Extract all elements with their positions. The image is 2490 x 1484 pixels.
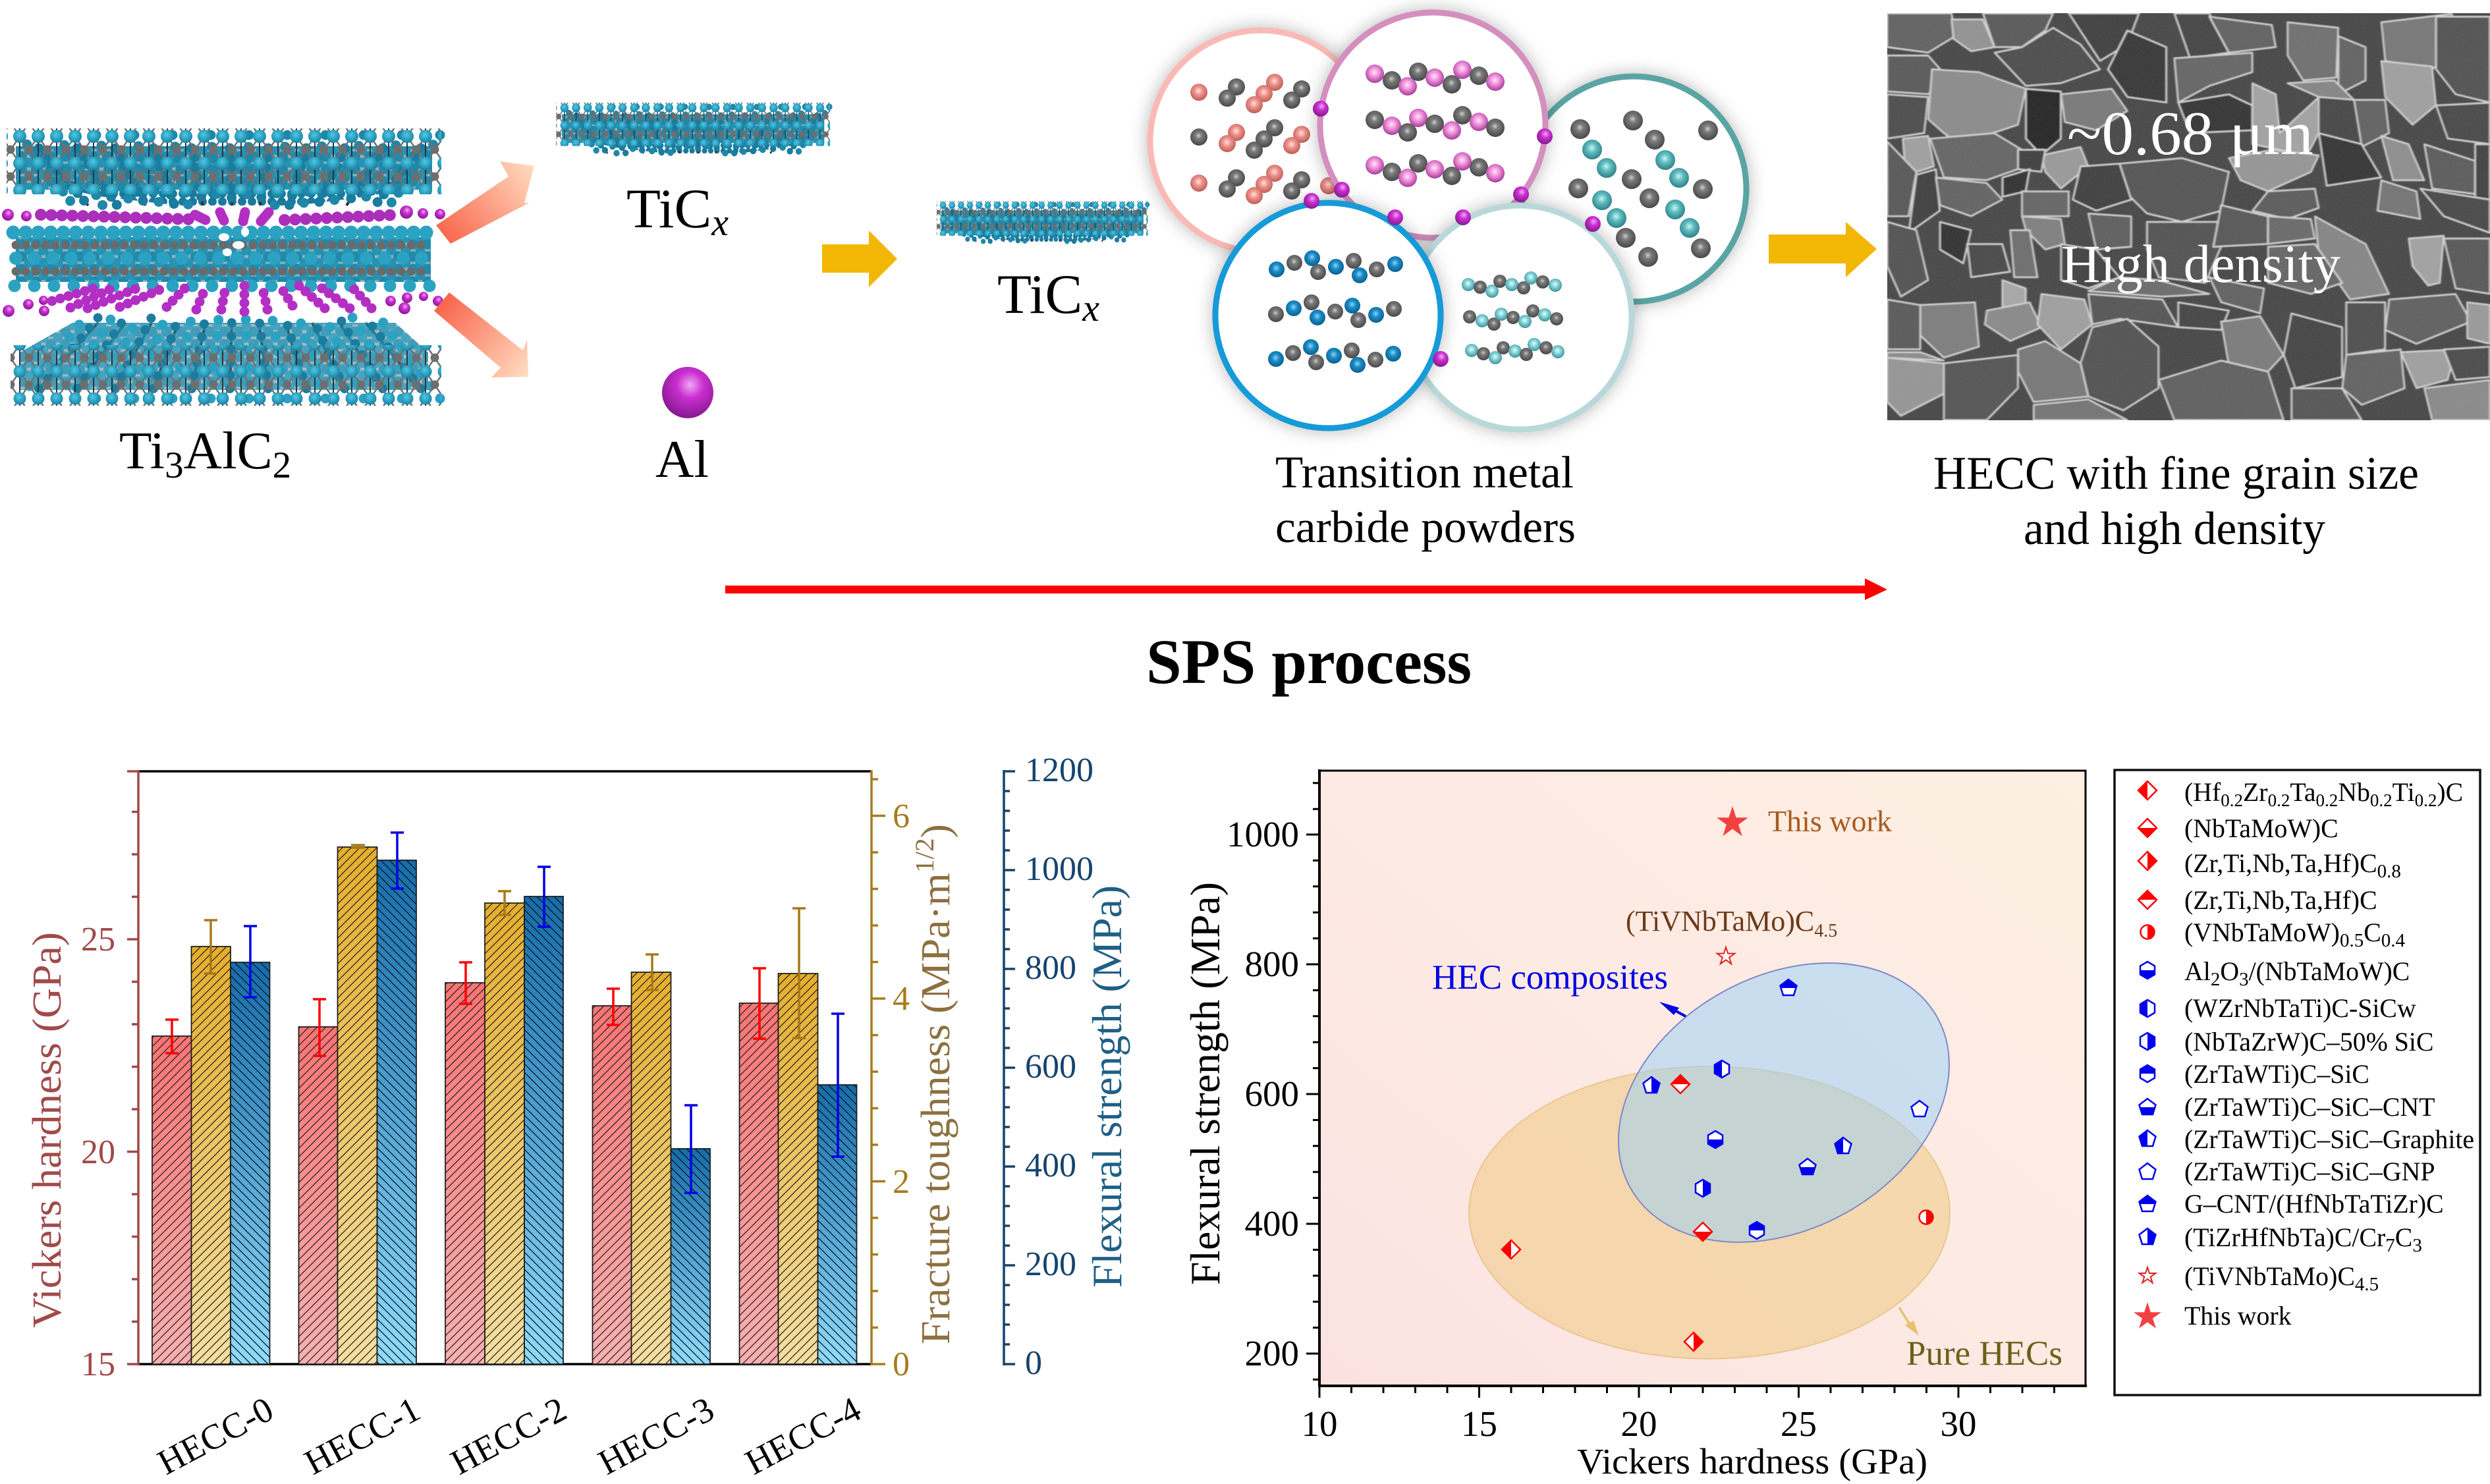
annotation: HEC composites: HEC composites	[1432, 958, 1668, 997]
error bars: strength	[244, 833, 844, 1193]
region: pure HECs	[1469, 1066, 1950, 1359]
legend text: 3	[2239, 969, 2249, 990]
axis: Vickers hardness: 20	[81, 1134, 115, 1171]
circle: light teal atoms	[1408, 206, 1632, 429]
label: HECC result: and high density	[2024, 503, 2325, 555]
axis: flexural strength: 600	[1025, 1048, 1076, 1086]
legend text: (ZrTaWTi)C–SiC	[2184, 1060, 2369, 1089]
frame and ticks	[1319, 771, 2086, 1386]
group HECC-4	[739, 974, 856, 1364]
error bars: toughness	[204, 845, 806, 1038]
legend text: 0.2	[2316, 790, 2338, 810]
legend text: (NbTaMoW)C	[2184, 814, 2338, 843]
legend text: C	[2364, 918, 2381, 947]
x tick labels: 25	[1781, 1404, 1817, 1444]
connector balls	[1304, 101, 1601, 367]
annotation: TiVNbTaMo: (TiVNbTaMo)C	[1626, 905, 1814, 937]
x tick labels: 10	[1302, 1404, 1337, 1444]
plot background	[1319, 771, 2086, 1386]
category labels: HECC-3	[592, 1389, 721, 1483]
label: HECC result	[1933, 448, 2419, 555]
legend text: Ta	[2290, 778, 2316, 807]
region: HEC composites	[1569, 907, 1999, 1298]
legend text: (ZrTaWTi)C–SiC–Graphite	[2184, 1125, 2474, 1154]
legend text: (ZrTaWTi)C–SiC–GNP	[2184, 1157, 2435, 1186]
axis: Vickers hardness: Vickers hardness (GPa)	[25, 932, 70, 1328]
label: Ti3AlC2: 3	[165, 445, 184, 486]
legend text: Nb	[2338, 778, 2370, 807]
circle: blue atoms	[1215, 203, 1441, 428]
axis: fracture toughness: 6	[893, 798, 910, 835]
annotation: Pure HECs	[1899, 1307, 2062, 1373]
annotation: TiVNbTaMo	[1626, 905, 1837, 964]
axis: flexural strength: 800	[1025, 949, 1076, 987]
y tick labels: 200	[1245, 1333, 1299, 1373]
axis: flexural strength: 200	[1025, 1246, 1076, 1283]
x axis title: Vickers hardness (GPa)	[1577, 1441, 1927, 1481]
arrow: Ti3AlC2 to Al	[434, 292, 528, 377]
lattice top layer	[7, 128, 441, 206]
icon: Al sphere	[662, 367, 713, 418]
y tick labels: 600	[1245, 1074, 1299, 1114]
axis: Vickers hardness: 15	[81, 1346, 115, 1383]
axis: flexural strength: 1200	[1025, 752, 1093, 789]
circle: teal atoms	[1521, 76, 1746, 302]
title: SPS process: SPS process	[1146, 626, 1472, 697]
annotation: HEC composites	[1432, 958, 1686, 1016]
legend text: (Zr,Ti,Nb,Ta,Hf)C	[2184, 886, 2377, 915]
panel: transition metal carbide circles	[1150, 13, 1746, 429]
axis: flexural strength: 1000	[1025, 850, 1093, 888]
legend text: (TiZrHfNbTa)C/Cr	[2184, 1223, 2385, 1252]
legend text	[2184, 778, 2474, 1331]
axis: flexural strength	[1004, 752, 1130, 1382]
group HECC-1	[299, 847, 416, 1364]
axis: flexural strength: 0	[1025, 1344, 1042, 1382]
arrow: gold to TiCx	[822, 231, 897, 287]
legend text: (TiVNbTaMo)C	[2184, 1262, 2355, 1291]
label: transition metal carbide powders: carbide powders	[1275, 502, 1576, 552]
legend text: 0.2	[2268, 790, 2290, 810]
axis: fracture toughness	[872, 770, 958, 1383]
legend text: 0.5	[2340, 930, 2364, 951]
label: TiCx middle: TiC	[997, 263, 1082, 325]
legend text: 0.4	[2381, 930, 2405, 951]
error bars: hardness	[165, 962, 766, 1056]
arrow: Ti3AlC2 to TiCx	[436, 161, 534, 244]
legend text: (WZrNbTaTi)C-SiCw	[2184, 994, 2416, 1023]
axis: flexural strength: Flexural strength (MPa)	[1084, 885, 1130, 1288]
annotation: this work: This work	[1768, 804, 1892, 838]
legend text: 7	[2385, 1235, 2395, 1256]
legend text: (NbTaZrW)C–50% SiC	[2184, 1028, 2434, 1057]
y axis title: Flexural strength (MPa)	[1182, 882, 1229, 1285]
legend text: Zr	[2243, 778, 2268, 807]
panel: SEM micrograph	[1887, 13, 2490, 420]
label: HECC result: HECC with fine grain size	[1933, 448, 2419, 499]
annotation: Pure HECs: Pure HECs	[1906, 1334, 2062, 1373]
panel: Ti3AlC2 lattice	[2, 128, 445, 406]
legend text: (ZrTaWTi)C–SiC–CNT	[2184, 1093, 2435, 1122]
legend text: C	[2395, 1223, 2412, 1252]
SEM label: grain size: ~0.68 μm	[2067, 99, 2313, 168]
label: Al: Al	[655, 431, 709, 489]
axis: fracture toughness: 4	[893, 980, 910, 1018]
category labels: HECC-1	[298, 1389, 427, 1483]
axis: fracture toughness: Fracture toughness (MPa·m	[914, 889, 958, 1344]
legend text: (VNbTaMoW)	[2184, 918, 2340, 947]
label: transition metal carbide powders	[1275, 447, 1576, 552]
axis: fracture toughness: 1/2	[910, 838, 939, 873]
category labels	[151, 1389, 868, 1483]
SEM label: density: High density	[2061, 234, 2340, 294]
axis: fracture toughness: )	[914, 824, 958, 838]
legend text: O	[2220, 957, 2239, 986]
category labels: HECC-2	[444, 1389, 573, 1483]
y tick labels	[1227, 814, 1299, 1373]
axis: flexural strength: 400	[1025, 1147, 1076, 1184]
y tick labels: 800	[1245, 944, 1299, 984]
axis: fracture toughness: 2	[893, 1163, 910, 1201]
lattice Al row 2	[3, 285, 443, 317]
chart: hardness vs strength scatter	[1182, 769, 2087, 1481]
label: TiCx middle: x	[1082, 287, 1099, 329]
group HECC-0	[152, 947, 270, 1364]
legend text: 0.2	[2221, 790, 2243, 810]
axis: Vickers hardness: 25	[81, 921, 115, 958]
legend markers	[2134, 781, 2161, 1329]
label: Ti3AlC2: AlC	[184, 421, 273, 480]
x tick labels	[1302, 1404, 1976, 1444]
legend text: 3	[2412, 1235, 2422, 1256]
x tick labels: 15	[1461, 1404, 1497, 1444]
TiCx lattice upper	[556, 103, 830, 153]
legend text: This work	[2184, 1302, 2292, 1331]
circle: rose atoms	[1320, 13, 1545, 238]
frame	[138, 771, 872, 1364]
legend text: (Hf	[2184, 778, 2221, 807]
annotation: TiVNbTaMo: 4.5	[1814, 921, 1837, 941]
x tick labels: 20	[1620, 1404, 1657, 1444]
group HECC-2	[445, 896, 563, 1364]
legend text: 0.2	[2370, 790, 2393, 810]
legend text: (Zr,Ti,Nb,Ta,Hf)C	[2184, 849, 2377, 878]
x tick labels: 30	[1941, 1404, 1976, 1444]
category labels: HECC-0	[151, 1389, 280, 1483]
label: transition metal carbide powders: Transition metal	[1275, 447, 1574, 497]
legend text: 2	[2211, 969, 2220, 990]
circle: pink atoms	[1150, 30, 1371, 252]
y tick labels: 1000	[1227, 814, 1299, 854]
lattice bottom layer	[11, 317, 441, 406]
category labels: HECC-4	[738, 1389, 868, 1483]
y tick labels: 400	[1245, 1203, 1299, 1244]
label: Ti3AlC2: Ti	[119, 421, 165, 480]
group HECC-3	[593, 972, 710, 1364]
legend text: G–CNT/(HfNbTaTiZr)C	[2184, 1190, 2444, 1219]
axis: Vickers hardness	[25, 770, 138, 1383]
SEM noise	[1887, 13, 2490, 420]
TiCx lattice middle	[937, 201, 1148, 242]
SEM grains	[1887, 13, 2490, 420]
legend text: 0.2	[2415, 790, 2437, 810]
arrow: gold to SEM	[1769, 222, 1877, 277]
label: TiCx upper: TiC	[626, 178, 711, 240]
arrow: SPS red	[725, 578, 1887, 600]
lattice Al row 1	[2, 206, 445, 221]
legend	[2115, 770, 2480, 1395]
legend text: )C	[2437, 778, 2463, 807]
legend text: Ti	[2393, 778, 2415, 807]
lattice middle layer	[13, 227, 435, 286]
chart: bars	[138, 771, 872, 1364]
label: TiCx upper: x	[711, 201, 729, 244]
legend text: 4.5	[2355, 1274, 2379, 1295]
axis: fracture toughness: 0	[893, 1346, 910, 1383]
legend text: /(NbTaMoW)C	[2249, 957, 2410, 986]
legend text: 0.8	[2377, 861, 2401, 882]
label: Ti3AlC2: 2	[273, 445, 291, 486]
data markers	[1502, 979, 1933, 1351]
legend text: Al	[2184, 957, 2211, 986]
